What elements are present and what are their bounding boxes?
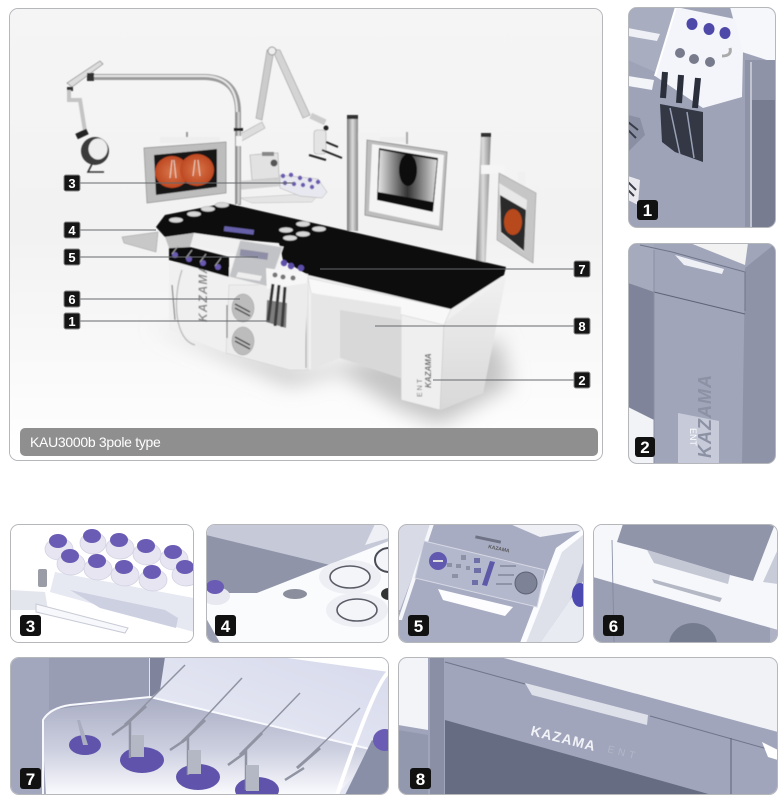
panel: detail 2 pedestal: ENT	[688, 428, 698, 446]
cabinet body: KAZAMA	[424, 353, 432, 388]
caption bar	[20, 428, 598, 456]
panel: detail 5 control panel	[398, 524, 584, 643]
examination lamp arm	[66, 60, 238, 204]
monitor: x-ray view	[364, 132, 446, 230]
foot controllers	[232, 294, 254, 354]
number 3	[20, 614, 40, 636]
callout 1	[64, 312, 80, 328]
number 2	[634, 436, 654, 456]
panel: detail 1 handpieces	[628, 7, 776, 228]
callout 6: 6	[68, 292, 75, 306]
black table top	[156, 202, 506, 308]
panel: detail 8 drawer: ENT	[606, 744, 639, 762]
callout 6	[64, 290, 80, 306]
cabinet body: KAZAMA	[196, 264, 210, 322]
number 5	[408, 614, 428, 636]
callout 7: 7	[578, 262, 585, 276]
callout 4	[64, 222, 80, 238]
number 5: 5	[413, 616, 423, 636]
monitor: endoscope view	[144, 132, 226, 202]
utility side tower with handpieces	[264, 259, 308, 370]
light source box and tray arm	[234, 112, 320, 204]
panel: detail 2 pedestal: KAZAMA	[694, 374, 714, 458]
number 2: 2	[640, 438, 649, 456]
leader lines	[80, 182, 574, 380]
panel: detail 8 drawer: KAZAMA	[529, 722, 597, 754]
callout 7	[574, 260, 590, 276]
monitor: side view	[496, 172, 536, 262]
callout 3: 3	[68, 176, 75, 190]
panel: detail 8 drawer	[398, 657, 778, 795]
number 8	[410, 768, 430, 788]
left side tray	[122, 232, 158, 252]
panel: detail 3 bottle tray	[10, 524, 194, 643]
poles	[236, 114, 504, 280]
number 6	[602, 614, 624, 636]
panel: detail 4 table top	[206, 524, 389, 643]
microscope arm	[240, 46, 342, 160]
callout 8	[574, 318, 590, 334]
callout 4: 4	[68, 222, 76, 238]
caption bar: KAU3000b 3pole type	[30, 434, 161, 450]
number 8: 8	[415, 770, 425, 788]
number 3: 3	[25, 616, 35, 636]
callout 8: 8	[578, 318, 585, 334]
illustration: ENT treatment unit	[66, 46, 536, 410]
number 4: 4	[220, 616, 230, 636]
syringe bottle tray	[280, 172, 326, 198]
control panel	[228, 240, 282, 286]
callout 2: 2	[578, 372, 585, 388]
number 1	[636, 200, 658, 220]
cabinet body: ENT	[416, 376, 424, 396]
callout 5: 5	[68, 250, 75, 264]
number 1: 1	[642, 200, 652, 220]
callout 3	[64, 174, 80, 190]
panel: detail 6 foot controller slot	[593, 524, 778, 643]
callout 5	[64, 248, 80, 264]
panel: main product view	[9, 8, 603, 461]
cabinet body	[168, 262, 506, 410]
panel: detail 7 instrument tray	[10, 657, 389, 795]
number 7	[20, 768, 40, 788]
callout 2	[574, 372, 590, 388]
floor shadow	[150, 324, 510, 424]
callout 1: 1	[68, 314, 75, 328]
number 6: 6	[608, 616, 618, 636]
number 7: 7	[25, 770, 35, 788]
panel: detail 2 pedestal	[628, 243, 776, 464]
panel: detail 5 control panel: KAZAMA	[487, 544, 510, 554]
number 4	[214, 614, 236, 636]
